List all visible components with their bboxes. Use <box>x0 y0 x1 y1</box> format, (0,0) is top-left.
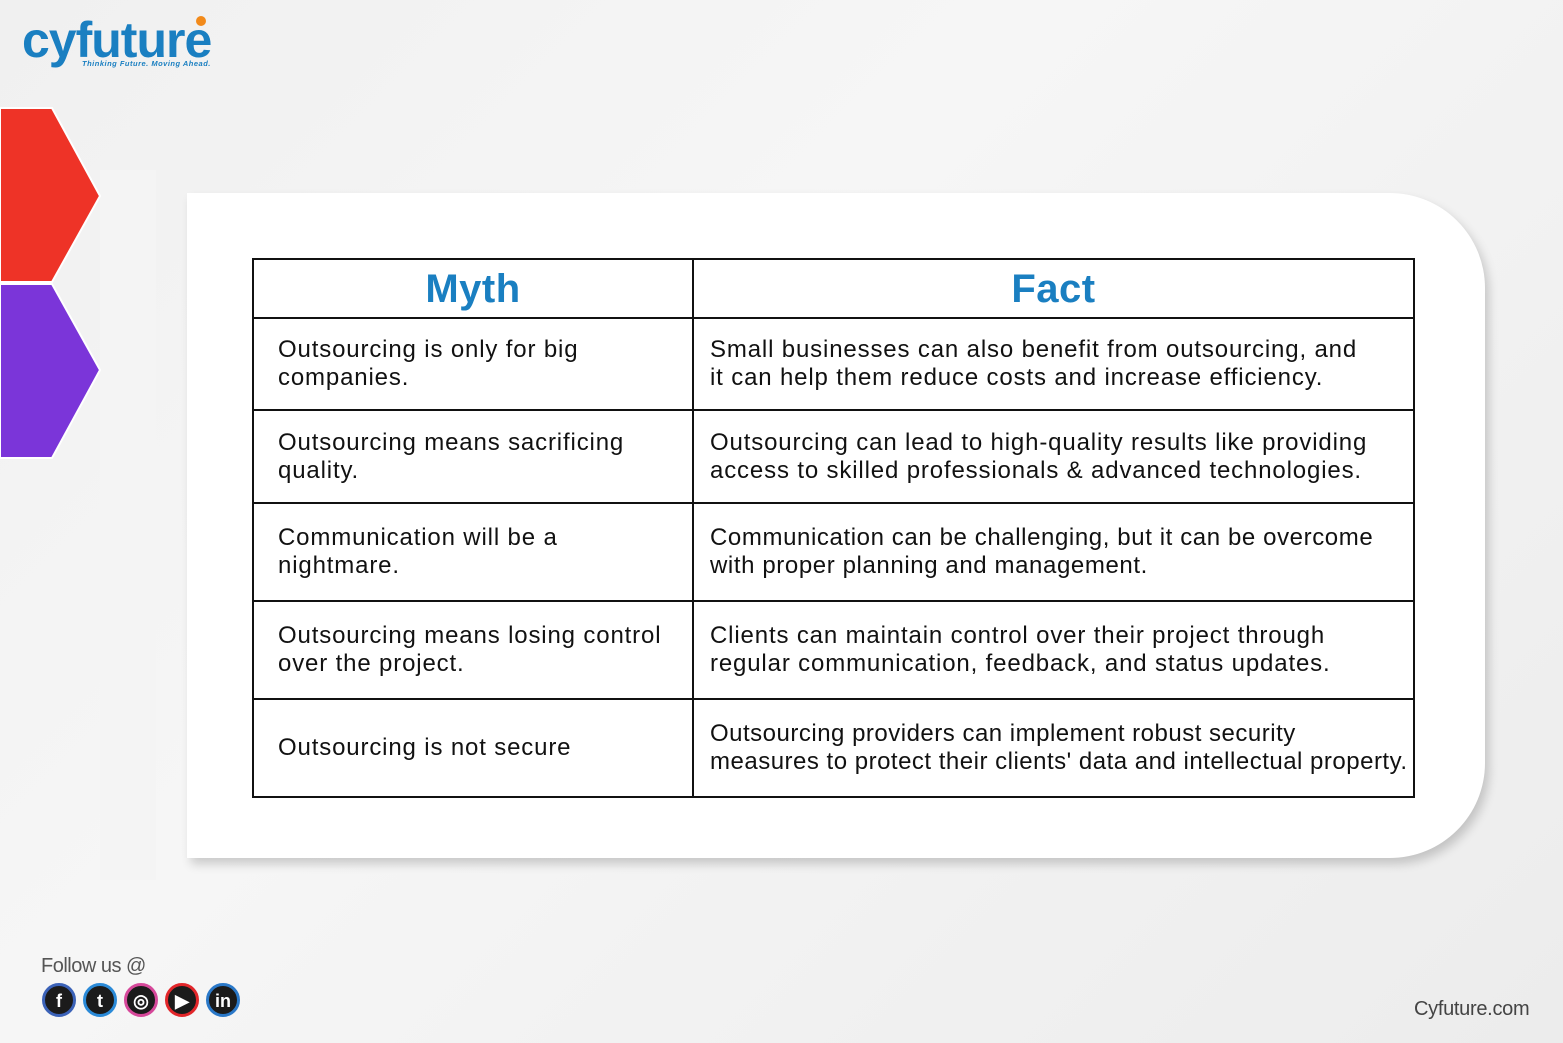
table: myth vs fact: quality. <box>278 456 359 484</box>
table: myth vs fact: Communication will be a <box>278 524 558 551</box>
table: myth vs fact: Communication can be challenging, but it can be overcome <box>710 524 1373 551</box>
table: myth vs fact: Outsourcing providers can implement robust security <box>710 720 1296 747</box>
table: myth vs fact: Outsourcing means sacrificing <box>278 428 624 456</box>
icons: social: f <box>56 991 62 1011</box>
table: myth vs fact: Fact <box>1011 266 1096 310</box>
icon: red and purple arrow shapes <box>0 107 101 459</box>
table: myth vs fact: over the project. <box>278 650 465 677</box>
table: myth vs fact: regular communication, feedback, and status updates. <box>710 650 1331 677</box>
table: myth vs fact: Outsourcing can lead to high-quality results like providing <box>710 428 1367 456</box>
icons: social <box>42 983 240 1017</box>
table: myth vs fact: Outsourcing is only for big <box>278 336 578 363</box>
panel: card <box>187 193 1485 858</box>
background strip <box>100 170 156 880</box>
text: follow us: Follow us @ <box>41 955 146 977</box>
logo: cyfuture <box>22 12 211 68</box>
table: myth vs fact: companies. <box>278 364 409 391</box>
table: myth vs fact: it can help them reduce costs and increase efficiency. <box>710 364 1323 391</box>
icons: social: ◎ <box>133 991 149 1011</box>
icons: social: ▶ <box>175 991 189 1011</box>
table: myth vs fact <box>252 258 1415 798</box>
table: myth vs fact: Outsourcing is not secure <box>278 734 571 761</box>
icons: social: t <box>97 991 103 1011</box>
text: website: Cyfuture.com <box>1414 998 1529 1020</box>
table: myth vs fact: with proper planning and management. <box>710 552 1148 579</box>
table: myth vs fact: Outsourcing means losing control <box>278 622 661 649</box>
table: myth vs fact: access to skilled professionals & advanced technologies. <box>710 456 1362 484</box>
table: myth vs fact: nightmare. <box>278 552 400 579</box>
table: myth vs fact: Clients can maintain control over their project through <box>710 622 1325 649</box>
table: myth vs fact: Myth <box>425 266 521 310</box>
logo: Thinking Future. Moving Ahead. <box>82 59 211 68</box>
table: myth vs fact: Small businesses can also benefit from outsourcing, and <box>710 336 1357 363</box>
icons: social: in <box>215 991 231 1011</box>
table: myth vs fact: measures to protect their clients' data and intellectual property. <box>710 748 1408 775</box>
